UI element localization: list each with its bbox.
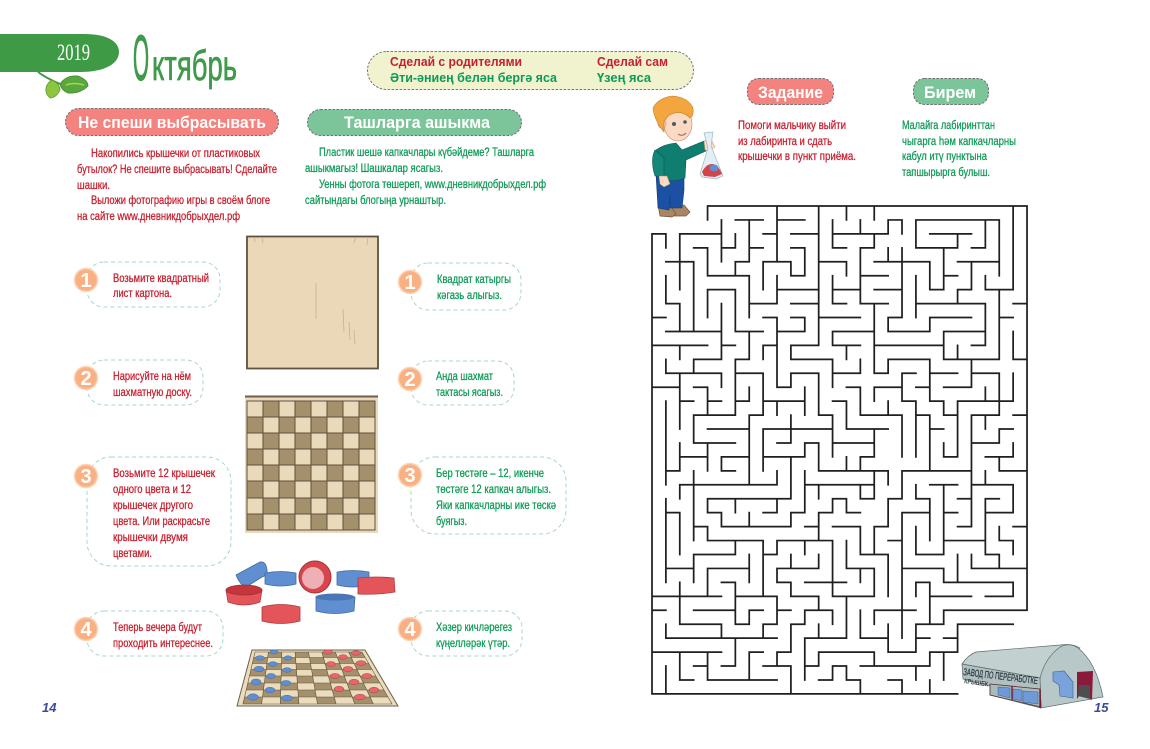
intro text: Tatar: Пластик шешә капкачлары күбәйдеме? Ташларга	[319, 145, 534, 159]
heading: Task Tatar: Бирем	[924, 83, 976, 102]
heading: Russian: Не спеши выбрасывать	[78, 113, 266, 132]
step 2 Russian: шахматную доску.	[113, 385, 192, 399]
step 1 Tatar	[398, 263, 521, 310]
step 4 Russian: проходить интереснее.	[113, 636, 213, 650]
step 1 Tatar: Квадрат катыргы	[437, 272, 511, 286]
step 2 Russian: 2	[80, 368, 92, 390]
task text: Tatar: кабул итү пунктына	[902, 149, 987, 163]
task text: Russian: Помоги мальчику выйти	[738, 118, 846, 132]
heading: Task	[748, 78, 834, 104]
step 3 Tatar: 3	[404, 465, 416, 487]
step 3 Tatar: төстәге 12 капкач алыгыз.	[436, 482, 551, 496]
task text: Tatar: Малайга лабиринттан	[902, 118, 995, 132]
step 1 Tatar: 1	[404, 272, 416, 294]
step 3 Tatar	[398, 457, 566, 534]
recycling factory: КРЫШЕК	[964, 678, 989, 688]
step 3 Tatar: буягыз.	[436, 514, 467, 528]
task text: Tatar	[902, 118, 1016, 179]
title: month	[133, 22, 237, 94]
recycling factory	[962, 644, 1103, 708]
page number 14: 14	[42, 700, 57, 715]
intro text: Russian: бутылок? Не спешите выбрасывать! Сделайте	[77, 162, 277, 176]
bottle caps	[226, 561, 395, 624]
intro text: Tatar: ашыкмагыз! Шашкалар ясагыз.	[305, 161, 443, 175]
cardboard square	[247, 236, 378, 368]
intro text: Tatar: Уенны фотога төшереп, www.дневникдобрыхдел.рф	[319, 177, 546, 191]
step 2 Tatar: 2	[404, 369, 416, 391]
step 2 Tatar: тактасы ясагыз.	[436, 385, 503, 399]
step 3 Russian: крышечек другого	[113, 498, 193, 512]
legend capsule	[368, 52, 694, 90]
step 3 Russian: крышечки двумя	[113, 530, 188, 544]
task text: Russian	[738, 118, 856, 163]
step 3 Russian: одного цвета и 12	[113, 482, 191, 496]
step 2 Russian	[74, 360, 203, 405]
step 4 Tatar: Хәзер кичләрегез	[436, 620, 512, 634]
recycling factory: ЗАВОД ПО ПЕРЕРАБОТКЕ	[963, 667, 1039, 687]
intro text: Tatar	[305, 145, 546, 207]
step 4 Russian	[74, 611, 223, 656]
maze	[652, 206, 1027, 694]
boy holding bag	[652, 96, 723, 217]
intro text: Russian: Накопились крышечки от пластиковых	[91, 146, 260, 160]
heading: Task: Задание	[758, 83, 823, 102]
step 1 Russian: Возьмите квадратный	[113, 271, 209, 285]
intro text: Russian: на сайте www.дневникдобрыхдел.рф	[77, 209, 240, 223]
intro text: Tatar: сайтындагы блогыңа урнаштыр.	[305, 193, 446, 207]
intro text: Russian: Выложи фотографию игры в своём блоге	[91, 193, 270, 207]
step 4 Russian: 4	[80, 619, 92, 641]
step 4 Tatar: күңелләрәк үтәр.	[436, 636, 510, 650]
step 3 Russian	[74, 457, 231, 566]
step 2 Tatar	[398, 361, 514, 405]
step 1 Tatar: кәгазь алыгыз.	[437, 288, 502, 302]
step 1 Russian	[74, 262, 220, 307]
step 2 Tatar: Анда шахмат	[436, 369, 493, 383]
icon: green leaves	[38, 72, 88, 98]
page number 15: 15	[1094, 700, 1109, 715]
title: month: О	[133, 22, 149, 94]
step 4 Tatar: 4	[404, 619, 416, 641]
game board with checkers	[230, 650, 400, 706]
heading: Russian	[66, 108, 278, 136]
step 3 Russian: цвета. Или раскрасьте	[113, 514, 210, 528]
legend capsule: Сделай с родителями	[390, 54, 522, 69]
task text: Tatar: чыгарга һәм капкачларны	[902, 134, 1016, 148]
step 3 Russian: цветами.	[113, 546, 152, 560]
task text: Russian: из лабиринта и сдать	[738, 134, 832, 148]
step 3 Russian: Возьмите 12 крышечек	[113, 466, 216, 480]
heading: Tatar	[308, 110, 522, 136]
step 2 Russian: Нарисуйте на нём	[113, 369, 191, 383]
step 1 Russian: лист картона.	[113, 286, 172, 300]
step 3 Russian: 3	[80, 466, 92, 488]
task text: Tatar: тапшырырга булыш.	[902, 165, 990, 179]
step 4 Tatar	[398, 611, 522, 656]
legend capsule: Үзең яса	[597, 70, 652, 85]
step 1 Russian: 1	[80, 270, 92, 292]
step 3 Tatar: Бер төстәге – 12, икенче	[436, 466, 544, 480]
heading: Tatar: Ташларга ашыкма	[344, 113, 491, 132]
step 4 Russian: Теперь вечера будут	[113, 620, 202, 634]
intro text: Russian: шашки.	[77, 178, 110, 192]
heading: Task Tatar	[914, 78, 988, 104]
task text: Russian: крышечки в пункт приёма.	[738, 149, 856, 163]
year tab: 2019	[57, 40, 90, 65]
year tab	[0, 34, 119, 72]
intro text: Russian	[77, 146, 277, 223]
legend capsule: Сделай сам	[597, 54, 668, 69]
checkerboard	[245, 396, 378, 533]
title: month: ктябрь	[152, 42, 237, 90]
step 3 Tatar: Яки капкачларны ике төскә	[436, 498, 556, 512]
legend capsule: Әти-әниең белән бергә яса	[390, 70, 558, 85]
